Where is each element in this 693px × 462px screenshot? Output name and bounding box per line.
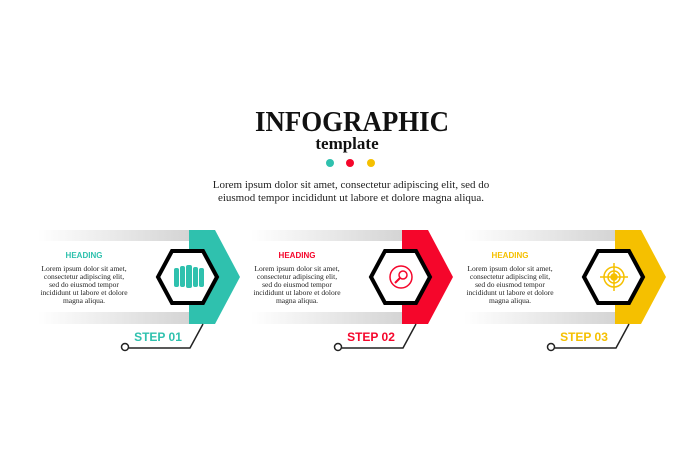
step 2: incididunt ut labore et dolore xyxy=(253,288,341,297)
intro text xyxy=(213,179,490,204)
step 3 xyxy=(464,230,666,350)
step 2: STEP 02 xyxy=(347,330,395,344)
step 1 xyxy=(38,230,240,350)
step 2: Lorem ipsum dolor sit amet, xyxy=(254,264,340,273)
step 3: incididunt ut labore et dolore xyxy=(466,288,554,297)
step 3: sed do eiusmod tempor xyxy=(475,280,545,289)
icon: magnifier xyxy=(390,266,412,288)
step 2: sed do eiusmod tempor xyxy=(262,280,332,289)
step 1: consectetur adipiscing elit, xyxy=(44,272,124,281)
icon: people xyxy=(174,265,204,288)
icon: target xyxy=(600,263,628,291)
color dots xyxy=(326,159,375,167)
step 2: magna aliqua. xyxy=(276,296,318,305)
step 2 xyxy=(251,230,453,350)
step 2: consectetur adipiscing elit, xyxy=(257,272,337,281)
step 3: magna aliqua. xyxy=(489,296,531,305)
title: INFOGRAPHIC xyxy=(255,107,449,138)
step 1: HEADING xyxy=(66,251,102,260)
title xyxy=(255,107,449,153)
step 1: sed do eiusmod tempor xyxy=(49,280,119,289)
intro text: Lorem ipsum dolor sit amet, consectetur adipiscing elit, sed do xyxy=(213,179,490,191)
intro text: eiusmod tempor incididunt ut labore et dolore magna aliqua. xyxy=(218,192,484,204)
step 3: Lorem ipsum dolor sit amet, xyxy=(467,264,553,273)
step 1: Lorem ipsum dolor sit amet, xyxy=(41,264,127,273)
step 1: incididunt ut labore et dolore xyxy=(40,288,128,297)
step 2: HEADING xyxy=(279,251,315,260)
step 3: STEP 03 xyxy=(560,330,608,344)
step 1: STEP 01 xyxy=(134,330,182,344)
step 3: consectetur adipiscing elit, xyxy=(470,272,550,281)
step 3: HEADING xyxy=(492,251,528,260)
step 1: magna aliqua. xyxy=(63,296,105,305)
title: template xyxy=(315,134,379,153)
